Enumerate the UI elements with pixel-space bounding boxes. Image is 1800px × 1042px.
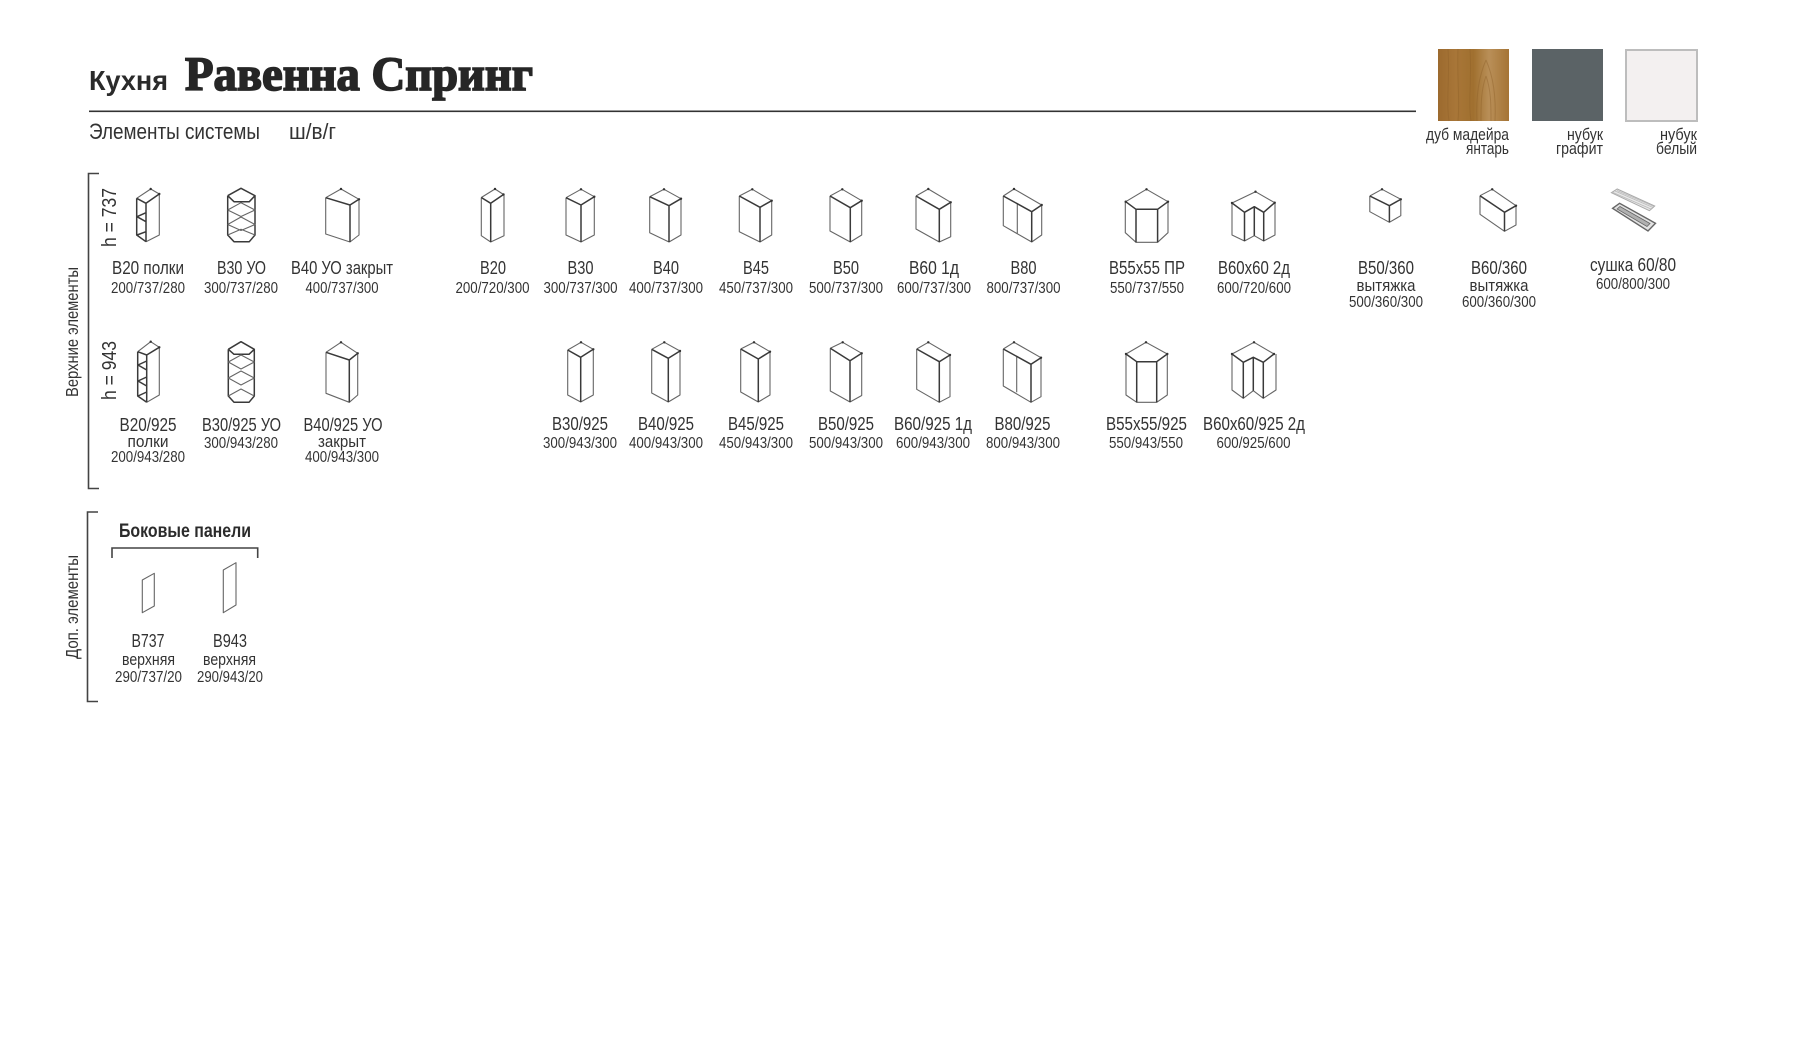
label: 600/925/600 <box>1216 435 1291 452</box>
label: 300/737/280 <box>204 280 278 297</box>
icon: cabinet <box>830 188 863 242</box>
label <box>986 258 1061 297</box>
label <box>1462 258 1536 311</box>
label <box>629 258 703 297</box>
label: В80 <box>1010 258 1036 278</box>
label: В60/925 1д <box>894 414 972 434</box>
label <box>204 258 278 297</box>
icon: cabinet <box>566 188 596 242</box>
item: В30 УО <box>204 188 278 297</box>
label: 400/737/300 <box>629 280 703 297</box>
label: В737 <box>132 631 164 651</box>
item: В60/925 1д <box>894 341 972 452</box>
section bracket <box>88 512 98 702</box>
label: 200/943/280 <box>111 449 185 466</box>
label: В55х55 ПР <box>1109 258 1185 278</box>
title: Кухня <box>89 65 168 96</box>
label: В30 УО <box>217 258 266 278</box>
icon: cabinet <box>650 188 682 242</box>
label: В943 <box>213 631 247 651</box>
label: 500/943/300 <box>809 435 883 452</box>
label <box>809 258 883 297</box>
label: В45/925 <box>728 414 784 434</box>
label <box>202 415 281 452</box>
item: В40 УО закрыт <box>291 188 393 297</box>
icon: tall corner open cabinet <box>228 342 254 402</box>
label: В50/925 <box>818 414 874 434</box>
item: В40/925 <box>629 341 703 452</box>
label: вытяжка <box>1470 276 1529 295</box>
label: 550/737/550 <box>1110 280 1184 297</box>
label: 550/943/550 <box>1109 435 1183 452</box>
label: 400/943/300 <box>305 449 379 466</box>
item: В20/925 полки <box>111 340 185 466</box>
icon: tall cabinet <box>830 341 863 402</box>
label <box>1349 258 1423 311</box>
icon: two-door cabinet <box>1003 188 1043 242</box>
label: верхняя <box>203 650 256 669</box>
icon: side panel <box>223 563 236 613</box>
icon: cabinet <box>916 188 952 242</box>
icon: tall corner cabinet <box>1125 341 1169 402</box>
section bracket <box>88 174 99 488</box>
item: В60х60/925 2д <box>1203 341 1305 452</box>
icon: tall open shelf cabinet <box>138 340 160 402</box>
label: 400/737/300 <box>306 280 379 297</box>
label <box>809 414 883 452</box>
label: В55х55/925 <box>1106 414 1187 434</box>
icon: tall L-shaped corner cabinet <box>1231 341 1276 398</box>
label <box>543 414 617 452</box>
header rule <box>89 110 1416 112</box>
label <box>1109 258 1185 297</box>
item: В50/925 <box>809 341 883 452</box>
label: В40/925 УО <box>304 415 382 435</box>
label: 300/737/300 <box>544 280 618 297</box>
item: В30/925 УО <box>202 342 281 452</box>
icon: tall cabinet <box>741 341 771 402</box>
label <box>629 414 703 452</box>
label: 800/737/300 <box>986 280 1061 297</box>
label: 450/943/300 <box>719 435 793 452</box>
label: В60х60 2д <box>1218 258 1290 278</box>
icon: side panel <box>142 573 154 613</box>
item: В20 <box>456 188 530 297</box>
label <box>719 414 793 452</box>
label <box>456 258 530 297</box>
label: 800/943/300 <box>986 435 1060 452</box>
label <box>897 258 971 297</box>
panel: доп. элементы <box>62 512 263 702</box>
label: В40/925 <box>638 414 694 434</box>
item: В40 <box>629 188 703 297</box>
label: В30/925 УО <box>202 415 281 435</box>
label: 600/800/300 <box>1596 276 1670 293</box>
label: 290/737/20 <box>115 669 182 686</box>
colour swatches <box>1426 49 1697 158</box>
label <box>1590 255 1676 293</box>
label: В30 <box>568 258 594 278</box>
label: В45 <box>743 258 769 278</box>
icon: tall closed corner cabinet <box>326 341 359 402</box>
icon: tall cabinet <box>568 341 594 402</box>
label: В20 <box>480 258 506 278</box>
row label h=943: h = 943 <box>99 341 121 400</box>
label: 300/943/280 <box>204 435 278 452</box>
swatch: нубук белый: белый <box>1656 139 1697 158</box>
item: В60х60 2д <box>1217 190 1291 297</box>
label: 200/720/300 <box>456 280 530 297</box>
label: В30/925 <box>552 414 608 434</box>
label <box>1217 258 1291 297</box>
icon: corner open cabinet <box>228 188 255 242</box>
item: В40/925 УО закрыт <box>304 341 382 466</box>
label <box>115 631 182 686</box>
section label: Верхние элементы <box>62 267 82 397</box>
label: В20 полки <box>112 258 184 278</box>
label <box>544 258 618 297</box>
item: В30/925 <box>543 341 617 452</box>
panel: верхние элементы <box>62 174 1676 488</box>
label <box>304 415 382 466</box>
label <box>197 631 263 686</box>
label: 500/360/300 <box>1349 294 1423 311</box>
heading bracket <box>112 548 258 558</box>
label: В60 1д <box>909 258 959 278</box>
row label h=737: h = 737 <box>99 188 121 247</box>
item: В737 верхняя <box>115 573 182 686</box>
icon: L-shaped corner cabinet <box>1231 190 1276 241</box>
item: сушка 60/80 <box>1590 189 1676 293</box>
label: 400/943/300 <box>629 435 703 452</box>
label <box>719 258 793 297</box>
label <box>111 258 185 297</box>
icon: hood cabinet <box>1480 188 1517 231</box>
label <box>291 258 393 297</box>
label: верхняя <box>122 650 175 669</box>
label: В60х60/925 2д <box>1203 414 1305 434</box>
icon: dish drying rack <box>1611 189 1656 231</box>
swatch: нубук графит: графит <box>1556 139 1603 158</box>
swatch: дуб мадейра янтарь: янтарь <box>1466 139 1509 158</box>
icon: corner cabinet <box>1124 188 1169 242</box>
icon: tall cabinet <box>917 341 951 402</box>
label: закрыт <box>318 432 366 451</box>
icon: cabinet <box>481 188 505 242</box>
swatch: нубук графит <box>1532 49 1603 158</box>
label: 290/943/20 <box>197 669 263 686</box>
item: В30 <box>544 188 618 297</box>
item: В50 <box>809 188 883 297</box>
item: В80 <box>986 188 1061 297</box>
label: В60/360 <box>1471 258 1527 278</box>
label: 200/737/280 <box>111 280 185 297</box>
swatch: дуб мадейра янтарь: дуб мадейра <box>1426 125 1509 144</box>
label: В80/925 <box>994 414 1050 434</box>
icon: tall cabinet <box>652 341 681 402</box>
subtitle: ш/в/г <box>289 119 336 144</box>
label: В40 УО закрыт <box>291 258 393 278</box>
label: В50 <box>833 258 859 278</box>
label: вытяжка <box>1356 276 1416 295</box>
icon: closed corner cabinet <box>326 188 360 242</box>
item: В45 <box>719 188 793 297</box>
swatch: нубук белый <box>1626 50 1697 158</box>
swatch: нубук графит: нубук <box>1567 125 1603 144</box>
item: В55х55 ПР <box>1109 188 1185 297</box>
title: Равенна Спринг <box>185 48 533 101</box>
label: сушка 60/80 <box>1590 255 1676 275</box>
item: В60 1д <box>897 188 971 297</box>
label: В50/360 <box>1358 258 1414 278</box>
label: В20/925 <box>120 415 176 435</box>
heading: боковые панели: Боковые панели <box>119 521 251 542</box>
item: В45/925 <box>719 341 793 452</box>
label: 600/943/300 <box>896 435 970 452</box>
label: 300/943/300 <box>543 435 617 452</box>
item: В60/360 вытяжка <box>1462 188 1536 311</box>
item: В55х55/925 <box>1106 341 1187 452</box>
item: В20 полки <box>111 188 185 297</box>
icon: open shelf cabinet <box>137 188 160 242</box>
subtitle: Элементы системы <box>89 119 260 144</box>
section label: Доп. элементы <box>62 555 82 659</box>
label: 600/720/600 <box>1217 280 1291 297</box>
icon: cabinet <box>739 188 773 242</box>
item: В80/925 <box>986 341 1060 452</box>
icon: tall two-door cabinet <box>1003 341 1042 402</box>
label <box>986 414 1060 452</box>
label <box>1106 414 1187 452</box>
item: В943 верхняя <box>197 563 263 686</box>
swatch: нубук белый: нубук <box>1660 125 1697 144</box>
label: В40 <box>653 258 679 278</box>
label: 500/737/300 <box>809 280 883 297</box>
item: В50/360 вытяжка <box>1349 188 1423 311</box>
label <box>894 414 972 452</box>
label: 600/737/300 <box>897 280 971 297</box>
label <box>111 415 185 466</box>
swatch: дуб мадейра янтарь <box>1426 49 1509 158</box>
label: полки <box>128 432 168 451</box>
label: 600/360/300 <box>1462 294 1536 311</box>
icon: hood cabinet <box>1370 188 1402 222</box>
label <box>1203 414 1305 452</box>
label: 450/737/300 <box>719 280 793 297</box>
